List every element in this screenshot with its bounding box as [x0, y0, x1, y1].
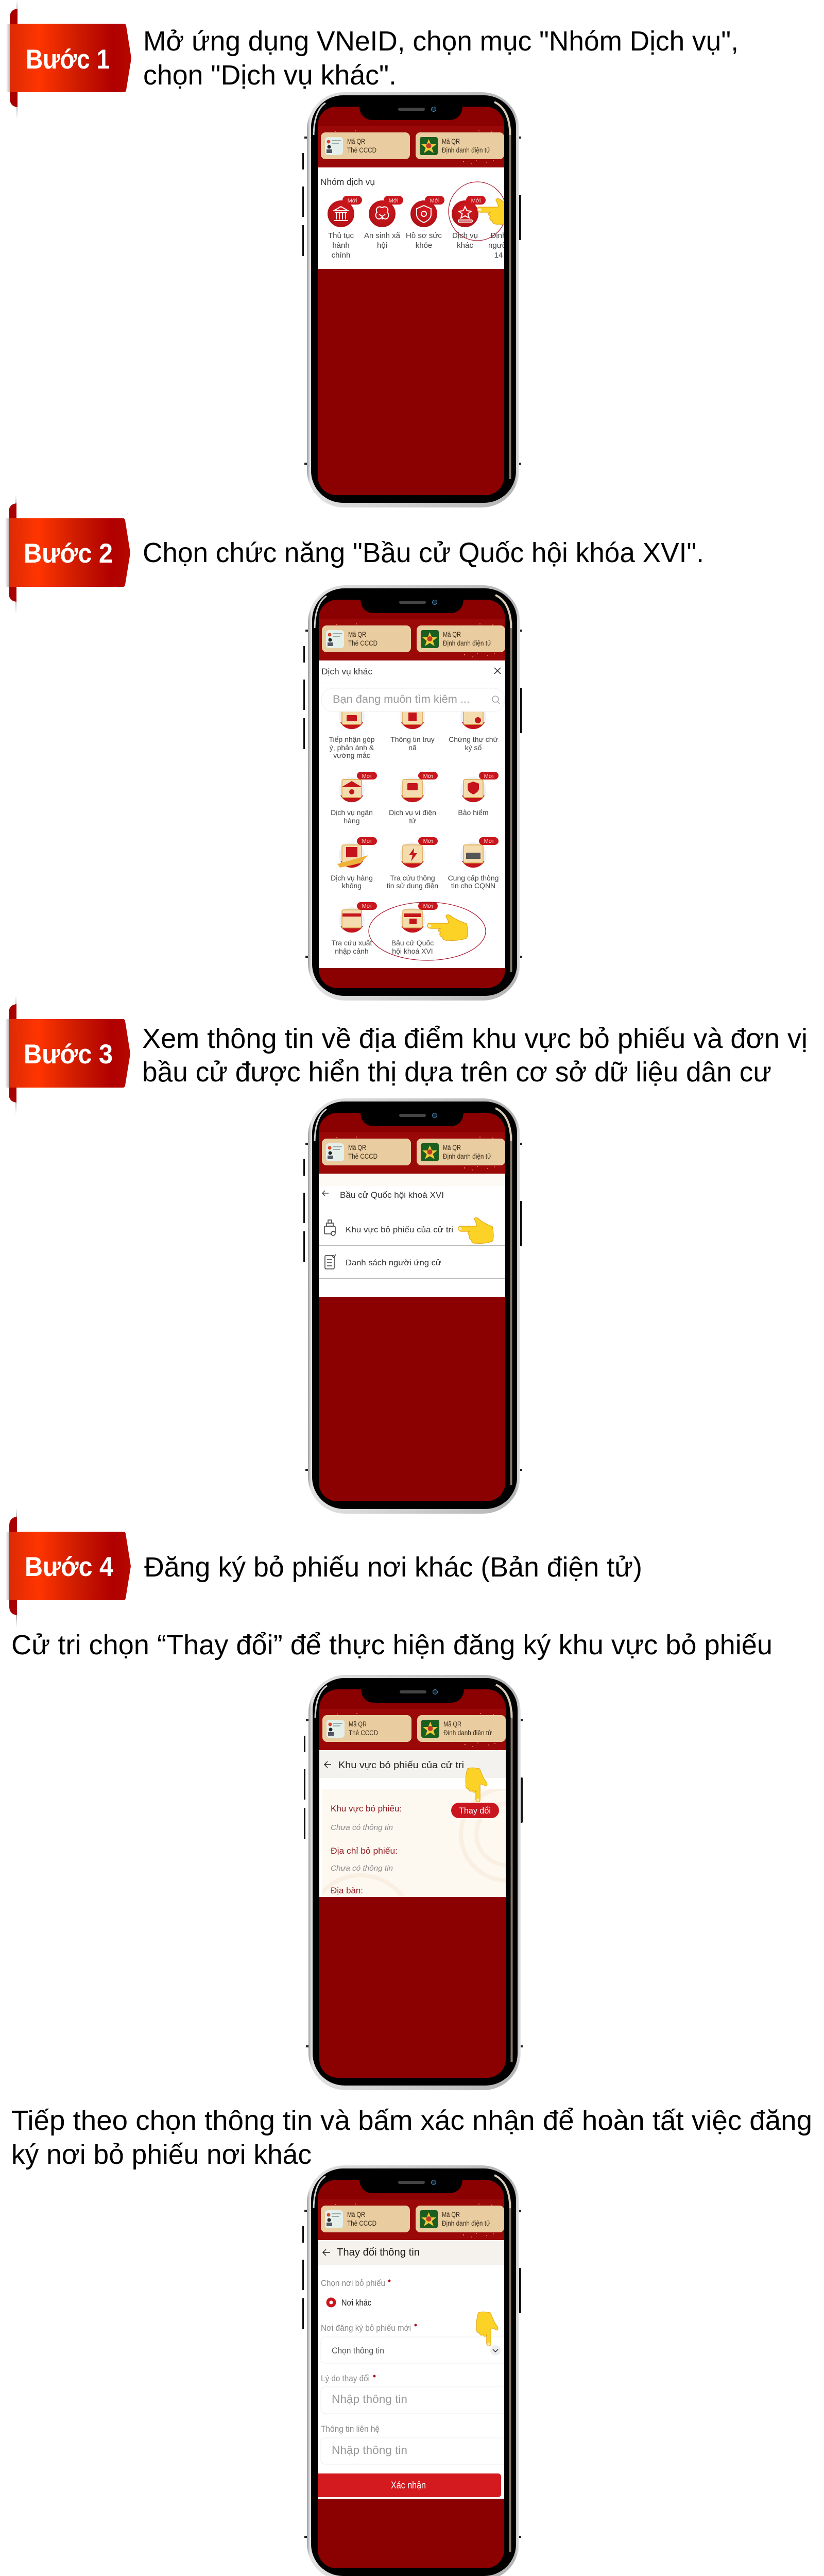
- step 3 instruction: [142, 1023, 808, 1088]
- QR cards: Định danh điện tử: [442, 2219, 490, 2227]
- voting area content: Khu vực bỏ phiếu:: [331, 1804, 402, 1814]
- service labels: tử: [409, 817, 416, 825]
- new badges: Mới: [430, 198, 439, 204]
- service labels: 14: [494, 251, 503, 260]
- step 4 instruction: Đăng ký bỏ phiếu nơi khác (Bản điện tử): [144, 1552, 642, 1583]
- election menu content: Bầu cử Quốc hội khoá XVI: [340, 1191, 444, 1200]
- field labels: Thông tin liên hệ: [321, 2424, 380, 2434]
- service labels: [328, 232, 504, 258]
- phone 2: other services screen: [303, 585, 522, 1001]
- service labels: tin cho CQNN: [451, 882, 495, 890]
- step 3 instruction: bầu cử được hiển thị dựa trên cơ sở dữ liệu dân cư: [142, 1057, 771, 1088]
- service labels: Định: [491, 231, 506, 240]
- service labels: khác: [457, 241, 473, 250]
- QR cards: Mã QR: [347, 2211, 365, 2218]
- form content: Chọn thông tin: [332, 2346, 384, 2355]
- election menu content: [319, 1174, 505, 1297]
- voting area content: Chưa có thông tin: [331, 1864, 393, 1873]
- QR cards: Mã QR: [347, 138, 365, 145]
- QR cards: Thẻ CCCD: [349, 1729, 378, 1737]
- QR cards: Định danh điện tử: [443, 1153, 491, 1160]
- service labels: Dịch vụ: [452, 231, 478, 240]
- step 1 instruction: chọn "Dịch vụ khác".: [143, 60, 397, 91]
- phone 1: service groups screen: [302, 92, 521, 507]
- service labels: Bảo hiểm: [458, 808, 489, 817]
- confirm button: Xác nhận: [391, 2480, 426, 2491]
- phone 4: voting area screen: [304, 1675, 523, 2090]
- service labels: ký số: [465, 743, 482, 752]
- phone 3: election menu screen: [303, 1098, 522, 1514]
- pointing hand: [477, 198, 504, 225]
- header and search: Bạn đang muôn tìm kiêm ...: [333, 693, 470, 705]
- new badges: Mới: [423, 903, 433, 909]
- step 4 badge: [6, 1508, 131, 1628]
- highlight circle: [449, 182, 506, 241]
- step 4 sub-instruction: change: Cử tri chọn “Thay đổi” để thực hiện đăng ký khu vực bỏ phiếu: [11, 1630, 772, 1660]
- step 2 badge: Bước 2: [24, 538, 113, 569]
- QR cards: [348, 631, 491, 647]
- pointing hand: [476, 2312, 498, 2346]
- pointing hand: [466, 1768, 487, 1802]
- new badges: Mới: [389, 198, 398, 204]
- field labels: Nơi đăng ký bỏ phiếu mới: [321, 2323, 411, 2333]
- step 4 sub-instruction: confirm: [11, 2105, 812, 2170]
- new badges: Mới: [471, 198, 480, 204]
- service labels: vướng mắc: [333, 751, 370, 759]
- new badges: Mới: [348, 198, 357, 204]
- service labels: Dịch vụ ngân: [331, 808, 373, 817]
- QR cards: Mã QR: [443, 1144, 461, 1151]
- new badges: Mới: [362, 773, 371, 779]
- service labels: Thủ tục: [328, 231, 354, 240]
- step 3 badge: Bước 3: [24, 1039, 113, 1070]
- step 4 sub-instruction: confirm: ký nơi bỏ phiếu nơi khác: [11, 2139, 312, 2170]
- service labels: Bầu cử Quốc: [391, 939, 434, 947]
- service labels: [329, 735, 499, 955]
- form content: [314, 2240, 517, 2499]
- QR cards: Thẻ CCCD: [348, 1153, 377, 1160]
- other services content: [319, 660, 505, 968]
- service labels: khỏe: [416, 241, 432, 250]
- QR cards: Mã QR: [443, 1720, 461, 1728]
- QR cards: Thẻ CCCD: [347, 2219, 376, 2227]
- QR cards: Định danh điện tử: [442, 146, 490, 154]
- QR cards: Mã QR: [443, 631, 461, 638]
- QR cards: Mã QR: [348, 1144, 366, 1151]
- new badges: [357, 772, 499, 910]
- change button: Thay đổi: [459, 1806, 491, 1816]
- service labels: Hồ sơ sức: [406, 231, 442, 240]
- service labels: người: [488, 241, 509, 250]
- pointing hand: [427, 915, 468, 940]
- service labels: Tra cứu thông: [390, 874, 435, 882]
- service labels: Chứng thư chữ: [449, 735, 498, 743]
- pointing hand: [458, 1218, 493, 1243]
- service labels: Thông tin truy: [390, 735, 435, 743]
- service labels: Dịch vụ hàng: [331, 874, 373, 882]
- service labels: hội: [377, 241, 387, 250]
- phone 5: change info form: [302, 2165, 521, 2576]
- service labels: An sinh xã: [364, 231, 401, 240]
- service labels: nã: [408, 743, 417, 752]
- QR cards: Mã QR: [349, 1720, 367, 1728]
- new badges: Mới: [484, 838, 493, 844]
- service labels: Tra cứu xuất: [332, 939, 372, 947]
- service icons: [337, 712, 486, 958]
- step 1 instruction: Mở ứng dụng VNeID, chọn mục "Nhóm Dịch vụ",: [143, 26, 739, 57]
- change button: [451, 1803, 499, 1818]
- step 3 badge: [5, 995, 130, 1115]
- new badges: Mới: [362, 838, 371, 844]
- highlight ellipse: [369, 902, 486, 960]
- new badges: Mới: [362, 903, 371, 909]
- field labels: Lý do thay đổi: [321, 2374, 370, 2383]
- radio option: Nơi khác: [341, 2298, 371, 2308]
- QR cards: Định danh điện tử: [443, 1729, 492, 1737]
- new badges: Mới: [423, 838, 433, 844]
- candidate list icon: [325, 1255, 336, 1269]
- service labels: nhập cảnh: [335, 947, 369, 955]
- step 2 instruction: Chọn chức năng "Bầu cử Quốc hội khóa XVI".: [143, 537, 704, 568]
- service labels: Cung cấp thông: [448, 874, 499, 882]
- new badges: Mới: [484, 773, 493, 779]
- service labels: tin sử dụng điện: [387, 882, 438, 890]
- QR cards: [347, 2211, 490, 2227]
- QR cards: [348, 1144, 491, 1160]
- service labels: Dịch vụ ví điện: [389, 808, 436, 817]
- service group content: [318, 167, 518, 269]
- step 1 instruction: [143, 26, 739, 91]
- service labels: ý, phản ánh &: [330, 743, 374, 752]
- voting area content: Khu vực bỏ phiếu của cử tri: [338, 1759, 464, 1770]
- service labels: không: [342, 882, 362, 890]
- form content: Nhập thông tin: [332, 2444, 407, 2456]
- QR cards: Định danh điện tử: [443, 639, 491, 647]
- voting area content: Địa bàn:: [331, 1886, 363, 1895]
- QR cards: Mã QR: [348, 631, 366, 638]
- ballot box icon: [324, 1220, 335, 1235]
- QR cards: Mã QR: [442, 2211, 460, 2218]
- voting area content: Chưa có thông tin: [331, 1823, 393, 1832]
- step 4 sub-instruction: confirm: Tiếp theo chọn thông tin và bấm xác nhận để hoàn tất việc đăng: [11, 2105, 812, 2136]
- field labels: [321, 2278, 411, 2434]
- radio option: [327, 2298, 371, 2308]
- service labels: Tiếp nhận góp: [329, 735, 375, 743]
- confirm button: [314, 2473, 501, 2497]
- QR cards: [347, 138, 490, 154]
- service labels: hành: [332, 241, 350, 250]
- step 1 badge: Bước 1: [26, 44, 110, 75]
- step 2 badge: [5, 495, 130, 614]
- service labels: hàng: [344, 817, 360, 825]
- QR cards: Thẻ CCCD: [348, 639, 377, 647]
- voting area content: [319, 1750, 506, 1897]
- QR cards: Mã QR: [442, 138, 460, 145]
- step 3 instruction: Xem thông tin về địa điểm khu vực bỏ phiếu và đơn vị: [142, 1023, 808, 1054]
- red service icons: [328, 200, 478, 227]
- header and search: [321, 667, 505, 711]
- field labels: Chọn nơi bỏ phiếu: [321, 2278, 385, 2288]
- form content: Thay đổi thông tin: [337, 2246, 420, 2258]
- service labels: hội khoá XVI: [392, 947, 433, 955]
- QR cards: [349, 1720, 492, 1737]
- election menu content: Danh sách người ứng cử: [346, 1259, 441, 1267]
- election menu content: Khu vực bỏ phiếu của cử tri: [346, 1226, 453, 1234]
- service labels: chính: [332, 251, 350, 260]
- header and search: Dịch vụ khác: [321, 667, 372, 676]
- input boxes: [321, 2337, 517, 2464]
- step 1 badge: [6, 0, 131, 120]
- QR cards: Thẻ CCCD: [347, 146, 376, 154]
- voting area content: Địa chỉ bỏ phiếu:: [331, 1846, 398, 1856]
- service group content: Nhóm dịch vụ: [320, 177, 375, 187]
- step 4 badge: Bước 4: [25, 1552, 113, 1582]
- new badges: Mới: [423, 773, 433, 779]
- form content: Nhập thông tin: [332, 2393, 407, 2405]
- new badges: [342, 196, 486, 205]
